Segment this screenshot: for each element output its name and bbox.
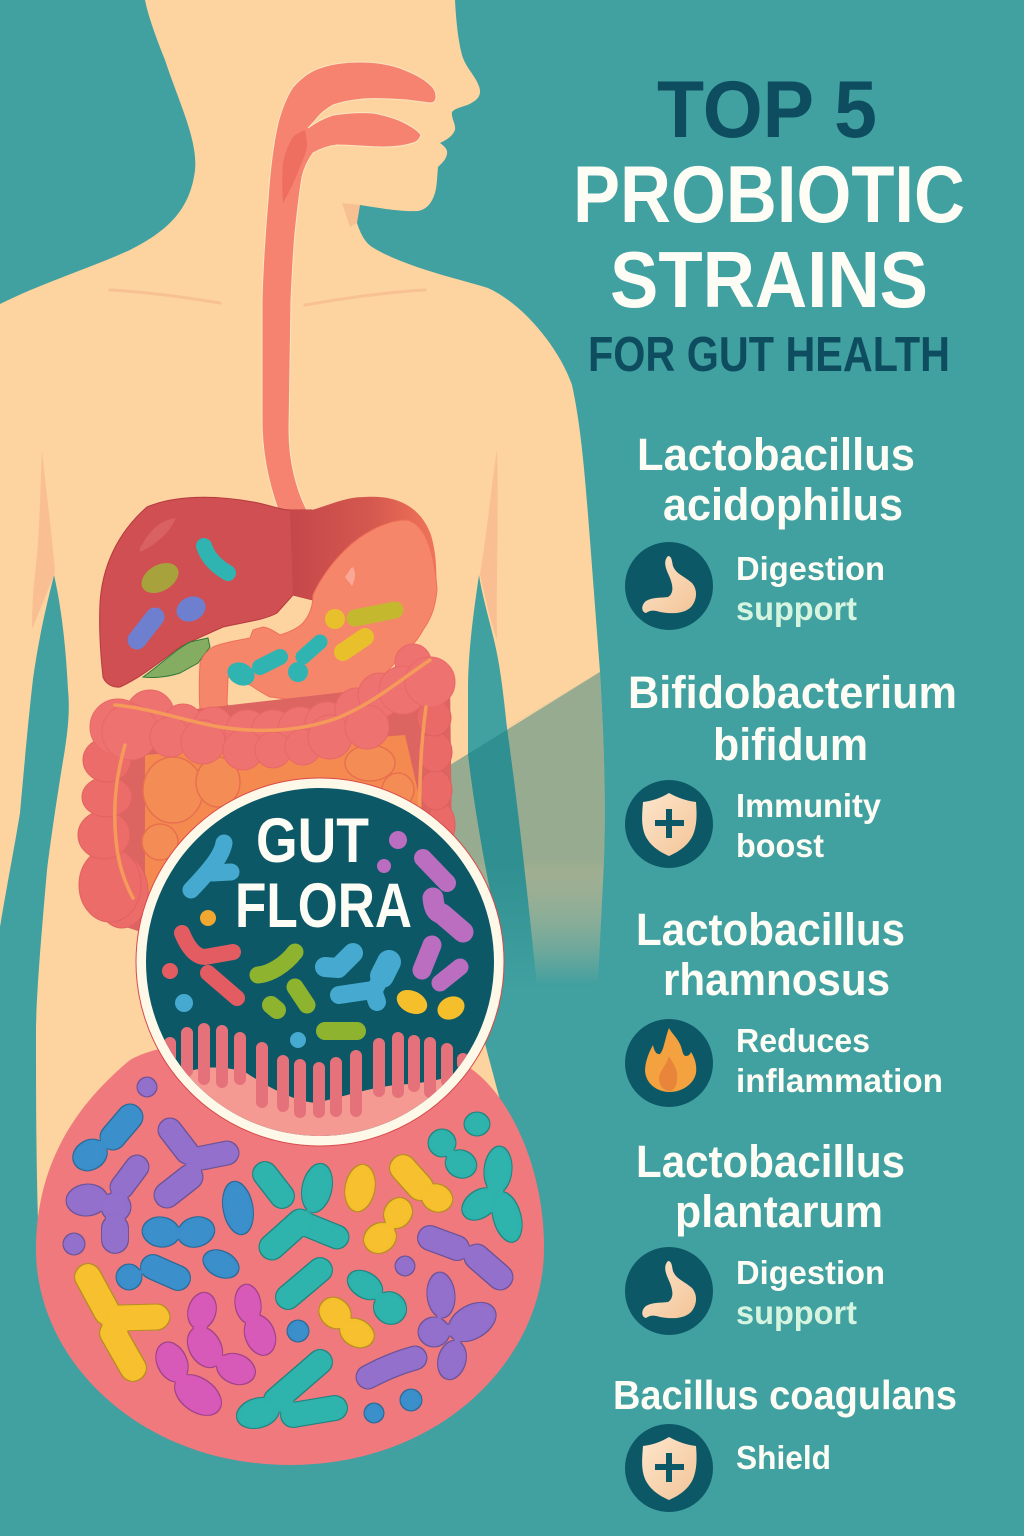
- gut bacteria circle: [36, 1035, 544, 1465]
- arm fading under the highlight beam: [507, 672, 605, 985]
- liver: [100, 497, 436, 687]
- strain 4 benefit: support: [736, 1294, 857, 1331]
- purple bacteria: [64, 1078, 502, 1382]
- human body silhouette: [0, 0, 600, 1220]
- icon: flame: [625, 1019, 713, 1107]
- neck crease: [342, 203, 360, 227]
- strain 1 name: [637, 429, 915, 530]
- lens title: GUT: [256, 806, 369, 876]
- main title: FOR GUT HEALTH: [588, 328, 950, 382]
- strain 3 benefit: inflammation: [736, 1062, 943, 1099]
- lens title: FLORA: [235, 871, 412, 941]
- lens green bacteria: [258, 952, 357, 1031]
- lens yellow bacteria: [393, 985, 468, 1024]
- transverse colon lobes: [90, 644, 455, 770]
- strain 2 name: bifidum: [713, 719, 868, 770]
- strain 3: Lactobacillus rhamnosus: [625, 904, 943, 1107]
- liver and stomach bacteria: [136, 546, 395, 690]
- villi: [170, 1029, 463, 1112]
- icon: shield plus: [625, 1424, 713, 1512]
- strain 5 name: Bacillus coagulans: [613, 1372, 957, 1418]
- strain 4 name: plantarum: [675, 1186, 883, 1237]
- strain 2 name: [628, 667, 957, 770]
- gut flora magnifier lens: [136, 778, 504, 1150]
- strain 2 benefit: Immunity: [736, 787, 882, 824]
- torso fading under the highlight beam: [440, 754, 490, 890]
- gallbladder: [143, 638, 210, 678]
- yellow bacteria: [88, 1163, 456, 1368]
- strain 1: Lactobacillus acidophilus: [625, 429, 915, 630]
- stomach: [199, 520, 437, 712]
- lens title: [235, 806, 412, 941]
- shoulder creases: [110, 290, 425, 305]
- main title: TOP 5: [657, 65, 877, 155]
- strain 1 name: acidophilus: [663, 479, 903, 530]
- main title: [573, 65, 965, 382]
- small intestine: [142, 735, 420, 900]
- strain 4: Lactobacillus plantarum: [625, 1136, 905, 1335]
- gut lining mucosa: [186, 1068, 451, 1136]
- strain 5 benefit: Shield: [736, 1439, 831, 1476]
- strain 4 benefit: [736, 1254, 885, 1331]
- highlight beam from gut to lens: [447, 672, 605, 990]
- strain 5: Bacillus coagulans: [613, 1372, 957, 1512]
- strain 4 benefit: Digestion: [736, 1254, 885, 1291]
- strain 1 name: Lactobacillus: [637, 429, 915, 480]
- lens purple bacteria: [422, 858, 463, 983]
- lens dots: [162, 831, 407, 1048]
- main title: PROBIOTIC: [573, 150, 965, 240]
- descending colon lobes: [417, 700, 455, 847]
- strain 2 name: Bifidobacterium: [628, 667, 957, 718]
- teal bacteria: [234, 1113, 526, 1432]
- ascending colon lobes: [78, 738, 148, 928]
- strain 1 benefit: Digestion: [736, 550, 885, 587]
- blue bacteria: [68, 1117, 421, 1422]
- strain 2: Bifidobacterium bifidum: [625, 667, 957, 868]
- colon bands: [115, 660, 430, 898]
- strain 3 benefit: Reduces: [736, 1022, 870, 1059]
- waist creases: [32, 450, 498, 640]
- strain 3 name: [636, 904, 905, 1005]
- icon: stomach: [625, 542, 713, 630]
- lens interior: [170, 1029, 470, 1150]
- strain 3 benefit: [736, 1022, 943, 1099]
- icon: shield plus: [625, 780, 713, 868]
- esophagus and mouth: [262, 62, 436, 520]
- lens blue bacteria: [191, 843, 389, 1002]
- colon and small intestine: [78, 644, 455, 935]
- icon: stomach: [625, 1247, 713, 1335]
- magenta bacteria: [151, 1284, 280, 1422]
- strain 3 name: rhamnosus: [663, 954, 890, 1005]
- strain 2 benefit: [736, 787, 882, 864]
- strain 4 name: [636, 1136, 905, 1237]
- strain 4 name: Lactobacillus: [636, 1136, 905, 1187]
- strain 1 benefit: [736, 550, 885, 627]
- strain 2 benefit: boost: [736, 827, 824, 864]
- main title: STRAINS: [610, 235, 928, 324]
- strain 3 name: Lactobacillus: [636, 904, 905, 955]
- strain 1 benefit: support: [736, 590, 857, 627]
- colon wall background: [100, 680, 452, 935]
- lens red bacteria: [182, 933, 237, 998]
